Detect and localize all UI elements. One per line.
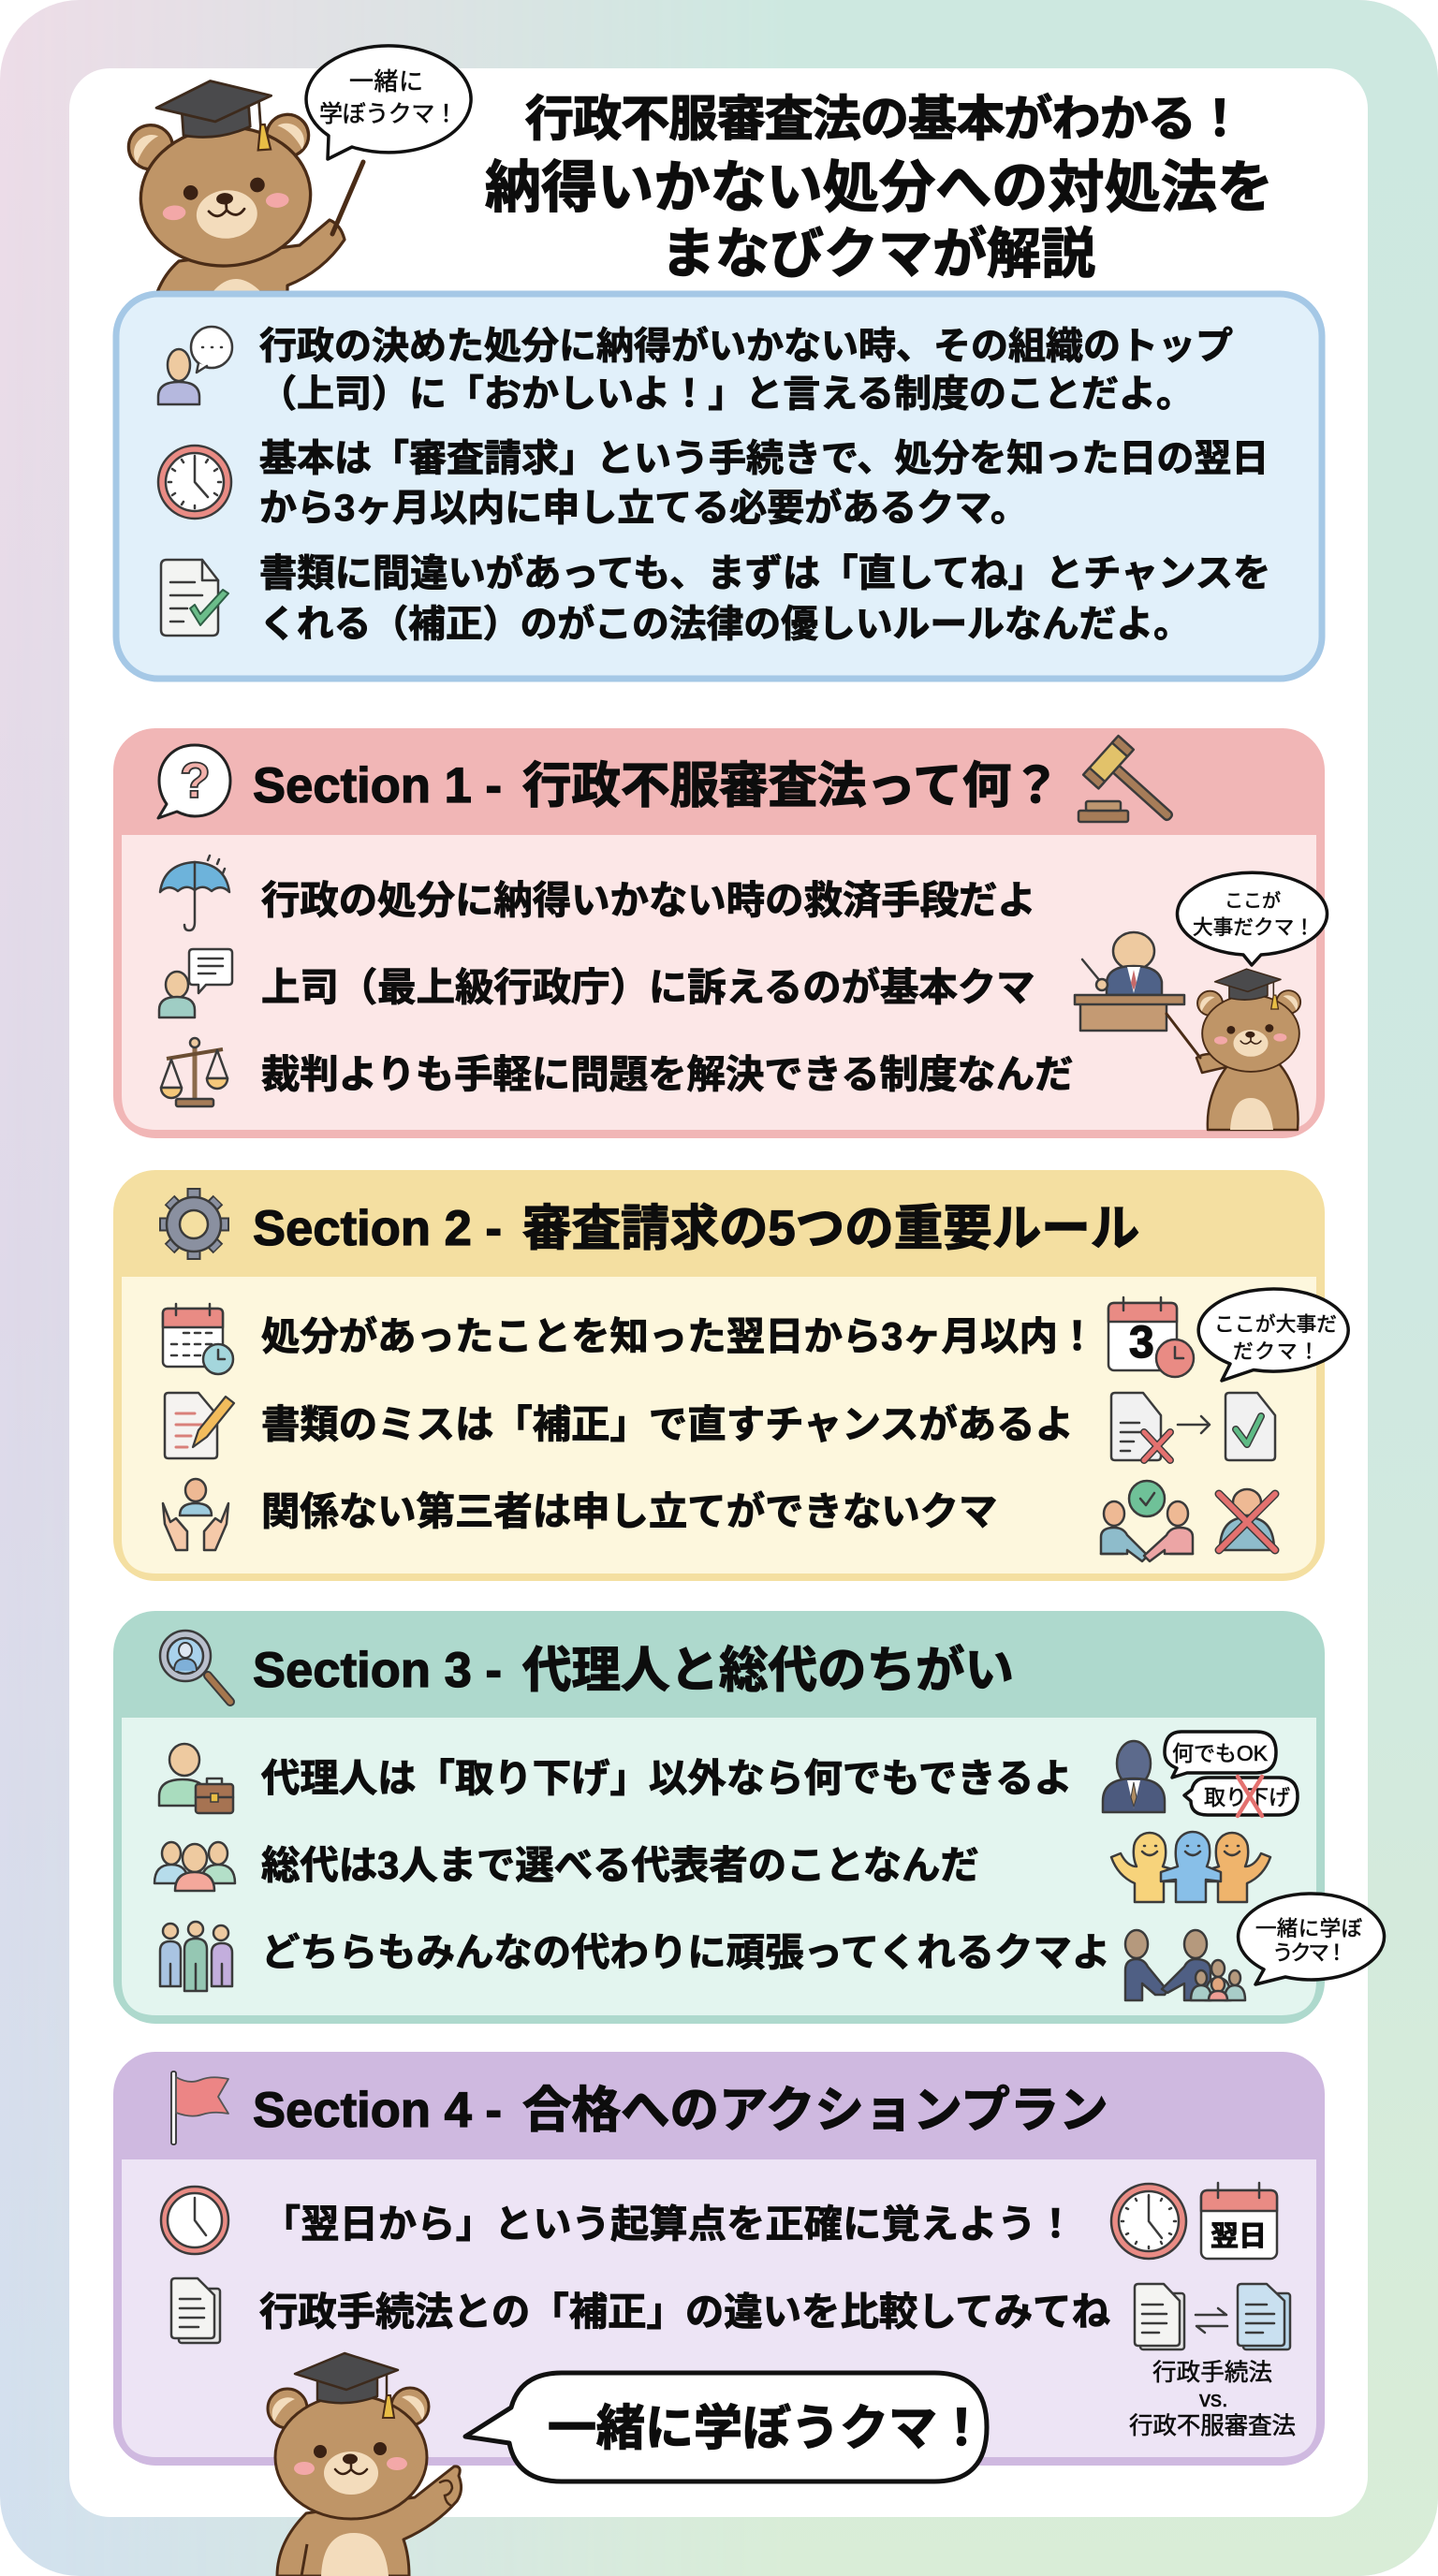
row: easier than court (161, 1038, 1074, 1106)
icon: clock large (1111, 2184, 1186, 2259)
speech bubble: withdrawal crossed: 取り下げ (1204, 1785, 1290, 1809)
icon: clock (161, 2187, 228, 2254)
text: comparison label (1129, 2360, 1296, 2439)
row: agent: 代理人は「取り下げ」以外なら何でもできるよ (261, 1757, 1073, 1800)
text: request deadline: 基本は「審査請求」という手続きで、処分を知った日の翌日 (259, 438, 1269, 479)
icon: gear (159, 1188, 229, 1260)
icon: three standing people (160, 1922, 232, 1991)
speech bubble: section 2: だクマ！ (1233, 1339, 1319, 1363)
icon: scales (161, 1038, 227, 1106)
illustration: official at desk (1075, 932, 1184, 1031)
mascot: section 1 bear (1167, 969, 1300, 1130)
row: correction (165, 1393, 1074, 1458)
icon: person in hands (163, 1479, 228, 1550)
icon: excluded person (1219, 1489, 1275, 1550)
text: request deadline: から3ヶ月以内に申し立てる必要があるクマ。 (259, 488, 1028, 529)
row: agent (159, 1744, 1073, 1813)
heading: section 4: 合格へのアクションプラン (522, 2083, 1108, 2138)
speech bubble: top: 学ぼうクマ！ (319, 101, 458, 127)
speech bubble: anything OK (1165, 1732, 1276, 1778)
speech bubble: top (306, 46, 471, 159)
icon: clock (158, 446, 231, 519)
icon: question bubble (158, 745, 230, 818)
icon: three people group (154, 1842, 235, 1891)
heading: section 2: Section 2 - (253, 1201, 502, 1256)
icon: three smiling people (1111, 1832, 1270, 1902)
text: correction: 書類に間違いがあっても、まずは「直してね」とチャンスを (259, 552, 1270, 594)
title: まなびクマが解説 (661, 224, 1095, 285)
icon: person with chat bubble (158, 327, 232, 404)
speech bubble: call to action: 一緒に学ぼうクマ！ (548, 2402, 986, 2456)
panel: section 1 (113, 728, 1328, 1138)
title (485, 93, 1273, 285)
panel: section 3 (113, 1611, 1385, 2024)
icon: documents (171, 2278, 220, 2343)
heading: section 2: 審査請求の5つの重要ルール (522, 1201, 1139, 1256)
speech bubble: section 3 (1239, 1894, 1385, 1984)
row: deadline (163, 1304, 1096, 1374)
speech bubble: section 2 (1198, 1289, 1348, 1381)
icon: calendar 3 with clock (1108, 1297, 1194, 1377)
icon: person with briefcase (159, 1744, 233, 1813)
text: comparison label: 行政不服審査法 (1129, 2413, 1296, 2439)
speech bubble: section 2: ここが大事だ (1214, 1312, 1337, 1336)
text: definition (259, 326, 1233, 415)
text: definition: （上司）に「おかしいよ！」と言える制度のことだよ。 (259, 373, 1194, 415)
icon: magnifier with person (160, 1631, 230, 1702)
icon: gavel (1078, 736, 1188, 838)
icon: calendar with clock (163, 1304, 233, 1374)
panel: section 2 (113, 1170, 1348, 1581)
text: definition: 行政の決めた処分に納得がいかない時、その組織のトップ (259, 326, 1233, 367)
text: correction: くれる（補正）のがこの法律の優しいルールなんだよ。 (259, 604, 1191, 645)
panel: summary (116, 294, 1322, 679)
heading: section 1: 行政不服審査法って何？ (522, 758, 1061, 813)
row: counting start (161, 2187, 1075, 2254)
icon: documents comparison (1135, 2284, 1290, 2349)
icon: document with check (161, 560, 228, 636)
speech bubble: call to action (465, 2373, 987, 2481)
speech bubble: section 3: 一緒に学ぼ (1255, 1917, 1362, 1940)
title: 納得いかない処分への対処法を (485, 156, 1273, 219)
text: request deadline (259, 438, 1269, 529)
row: compare (171, 2278, 1110, 2343)
icon: document with pencil (165, 1393, 234, 1458)
row: both work for you: どちらもみんなの代わりに頑張ってくれるクマよ (261, 1931, 1110, 1974)
icon: suited man (1103, 1741, 1165, 1812)
text: correction (259, 552, 1270, 645)
heading: section 3: 代理人と総代のちがい (522, 1643, 1014, 1698)
heading: section 1: Section 1 - (253, 758, 502, 813)
row: correction: 書類のミスは「補正」で直すチャンスがあるよ (261, 1403, 1074, 1446)
panel: section 4 (113, 2052, 1325, 2466)
icon: handshake group (1125, 1930, 1245, 2000)
icon: handshake with check (1101, 1481, 1193, 1561)
row: remedy (160, 856, 1036, 930)
title: 行政不服審査法の基本がわかる！ (525, 93, 1244, 147)
icon: question bubble: ? (180, 753, 211, 809)
row: remedy: 行政の処分に納得いかない時の救済手段だよ (261, 879, 1036, 922)
row: easier than court: 裁判よりも手軽に問題を解決できる制度なんだ (261, 1053, 1074, 1096)
heading: section 4: Section 4 - (253, 2083, 502, 2138)
speech bubble: withdrawal crossed (1184, 1777, 1298, 1816)
icon: umbrella (160, 856, 229, 930)
row: deadline: 処分があったことを知った翌日から3ヶ月以内！ (261, 1315, 1096, 1358)
icon: calendar next day (1201, 2183, 1277, 2259)
icon: document with error to corrected document (1111, 1393, 1275, 1460)
speech bubble: top: 一緒に (349, 67, 423, 95)
row: counting start: 「翌日から」という起算点を正確に覚えよう！ (262, 2203, 1075, 2246)
mascot: bottom bear (268, 2353, 462, 2576)
icon: person with memo bubble (159, 949, 232, 1017)
row: representatives: 総代は3人まで選べる代表者のことなんだ (261, 1844, 979, 1887)
speech bubble: section 1 (1178, 872, 1328, 965)
row: third party: 関係ない第三者は申し立てができないクマ (261, 1490, 997, 1533)
heading: section 3: Section 3 - (253, 1643, 502, 1698)
row: compare: 行政手続法との「補正」の違いを比較してみてね (259, 2291, 1110, 2334)
icon: flag (171, 2071, 228, 2144)
row: both work for you (160, 1922, 1110, 1991)
row: superior: 上司（最上級行政庁）に訴えるのが基本クマ (261, 966, 1035, 1009)
row: third party (163, 1479, 997, 1550)
icon: calendar 3 with clock: 3 (1129, 1318, 1154, 1368)
text: comparison label: vs. (1199, 2387, 1228, 2412)
speech bubble: anything OK: 何でもOK (1172, 1741, 1269, 1765)
icon: calendar next day: 翌日 (1211, 2221, 1267, 2252)
speech bubble: section 1: 大事だクマ！ (1193, 916, 1314, 939)
text: comparison label: 行政手続法 (1152, 2360, 1272, 2386)
speech bubble: section 3: うクマ！ (1272, 1941, 1347, 1965)
speech bubble: section 1: ここが (1225, 890, 1281, 912)
mascot: top bear pointing (125, 74, 363, 294)
row: superior (159, 949, 1035, 1017)
